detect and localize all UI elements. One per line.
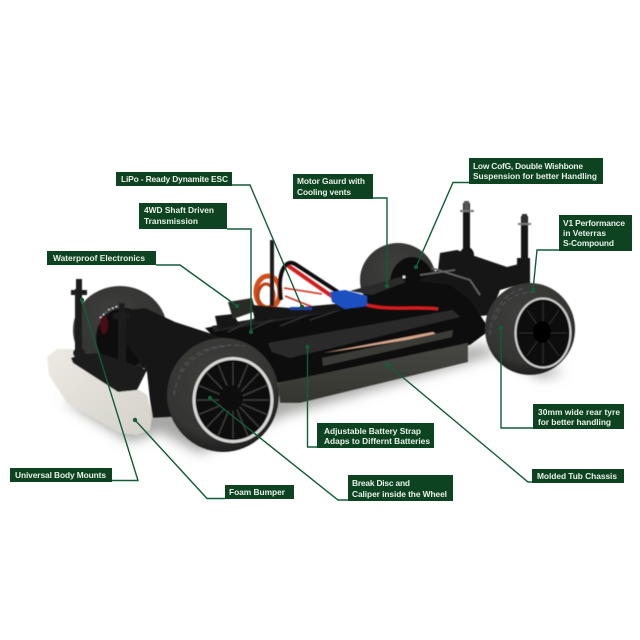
label: motor guard: Cooling vents bbox=[297, 187, 351, 197]
label: LiPo ESC: LiPo - Ready Dynamite ESC bbox=[121, 174, 228, 184]
main black chassis bbox=[205, 277, 490, 383]
leader: rear tyre bbox=[499, 326, 533, 428]
label: motor guard: Motor Gaurd with bbox=[297, 176, 365, 186]
front suspension bbox=[125, 308, 235, 418]
label: tub chassis: Molded Tub Chassis bbox=[537, 471, 617, 481]
label: double wishbone: Low CofG, Double Wishbone bbox=[473, 161, 583, 171]
label: rear tyre bbox=[533, 404, 624, 429]
leader: brake disc bbox=[208, 396, 348, 500]
blue connector bbox=[330, 290, 367, 309]
rear wheel bbox=[485, 283, 575, 375]
label: V1 performance: in Veterras bbox=[563, 228, 606, 238]
leader: battery strap bbox=[305, 345, 317, 447]
label: V1 performance bbox=[559, 215, 632, 251]
leader: LiPo ESC bbox=[232, 185, 304, 309]
wiring and antenna bbox=[256, 240, 338, 308]
label: universal body mounts bbox=[10, 468, 112, 482]
label: rear tyre: 30mm wide rear tyre bbox=[538, 407, 620, 417]
label: tub chassis bbox=[532, 469, 624, 483]
molded tub bbox=[278, 343, 468, 403]
label: 4WD transmission: Transmission bbox=[144, 216, 198, 226]
label: V1 performance: S-Compound bbox=[563, 238, 614, 248]
label: brake disc: Caliper inside the Wheel bbox=[352, 489, 447, 499]
label: foam bumper bbox=[225, 485, 294, 499]
label: foam bumper: Foam Bumper bbox=[229, 487, 286, 497]
ESC box bbox=[228, 298, 256, 319]
leader: double wishbone bbox=[414, 182, 469, 269]
label: 4WD transmission: 4WD Shaft Driven bbox=[144, 205, 214, 215]
leader: V1 performance bbox=[531, 250, 559, 292]
label: rear tyre: for better handling bbox=[538, 417, 611, 427]
bumper mount and posts bbox=[71, 279, 147, 392]
label: brake disc bbox=[348, 475, 453, 501]
leader: waterproof electronics bbox=[156, 265, 239, 308]
ESC plate bbox=[252, 303, 349, 322]
servo block bbox=[215, 314, 240, 329]
label: double wishbone bbox=[469, 158, 603, 184]
leader: 4WD transmission bbox=[227, 229, 253, 334]
label: universal body mounts: Universal Body Mounts bbox=[15, 470, 106, 480]
leader: foam bumper bbox=[133, 418, 225, 498]
label: brake disc: Break Disc and bbox=[352, 478, 410, 488]
car chassis photo illustration bbox=[47, 201, 575, 453]
label: V1 performance: V1 Performance bbox=[563, 218, 625, 228]
leader: universal body mounts bbox=[80, 298, 138, 480]
label: battery strap bbox=[317, 423, 434, 448]
rear suspension and body posts bbox=[410, 201, 531, 318]
front back wheel bbox=[73, 286, 167, 374]
blue capacitor bbox=[290, 307, 312, 310]
label: battery strap: Adjustable Battery Strap bbox=[324, 426, 421, 436]
front wheel bbox=[167, 338, 279, 452]
ground shadow bbox=[62, 345, 565, 453]
label: double wishbone: Suspension for better Handling bbox=[473, 171, 597, 181]
label: battery strap: Adaps to Differnt Batteries bbox=[324, 436, 430, 446]
rear back wheel bbox=[360, 243, 436, 317]
label: LiPo ESC bbox=[116, 172, 232, 186]
label: waterproof electronics bbox=[47, 251, 156, 265]
red battery wire bbox=[367, 305, 438, 309]
label: waterproof electronics: Waterproof Electronics bbox=[53, 253, 145, 263]
leader: tub chassis bbox=[386, 363, 532, 482]
label: motor guard bbox=[293, 174, 373, 199]
leader: motor guard bbox=[373, 198, 389, 288]
label: 4WD transmission bbox=[139, 203, 227, 229]
foam bumper bbox=[47, 349, 152, 435]
